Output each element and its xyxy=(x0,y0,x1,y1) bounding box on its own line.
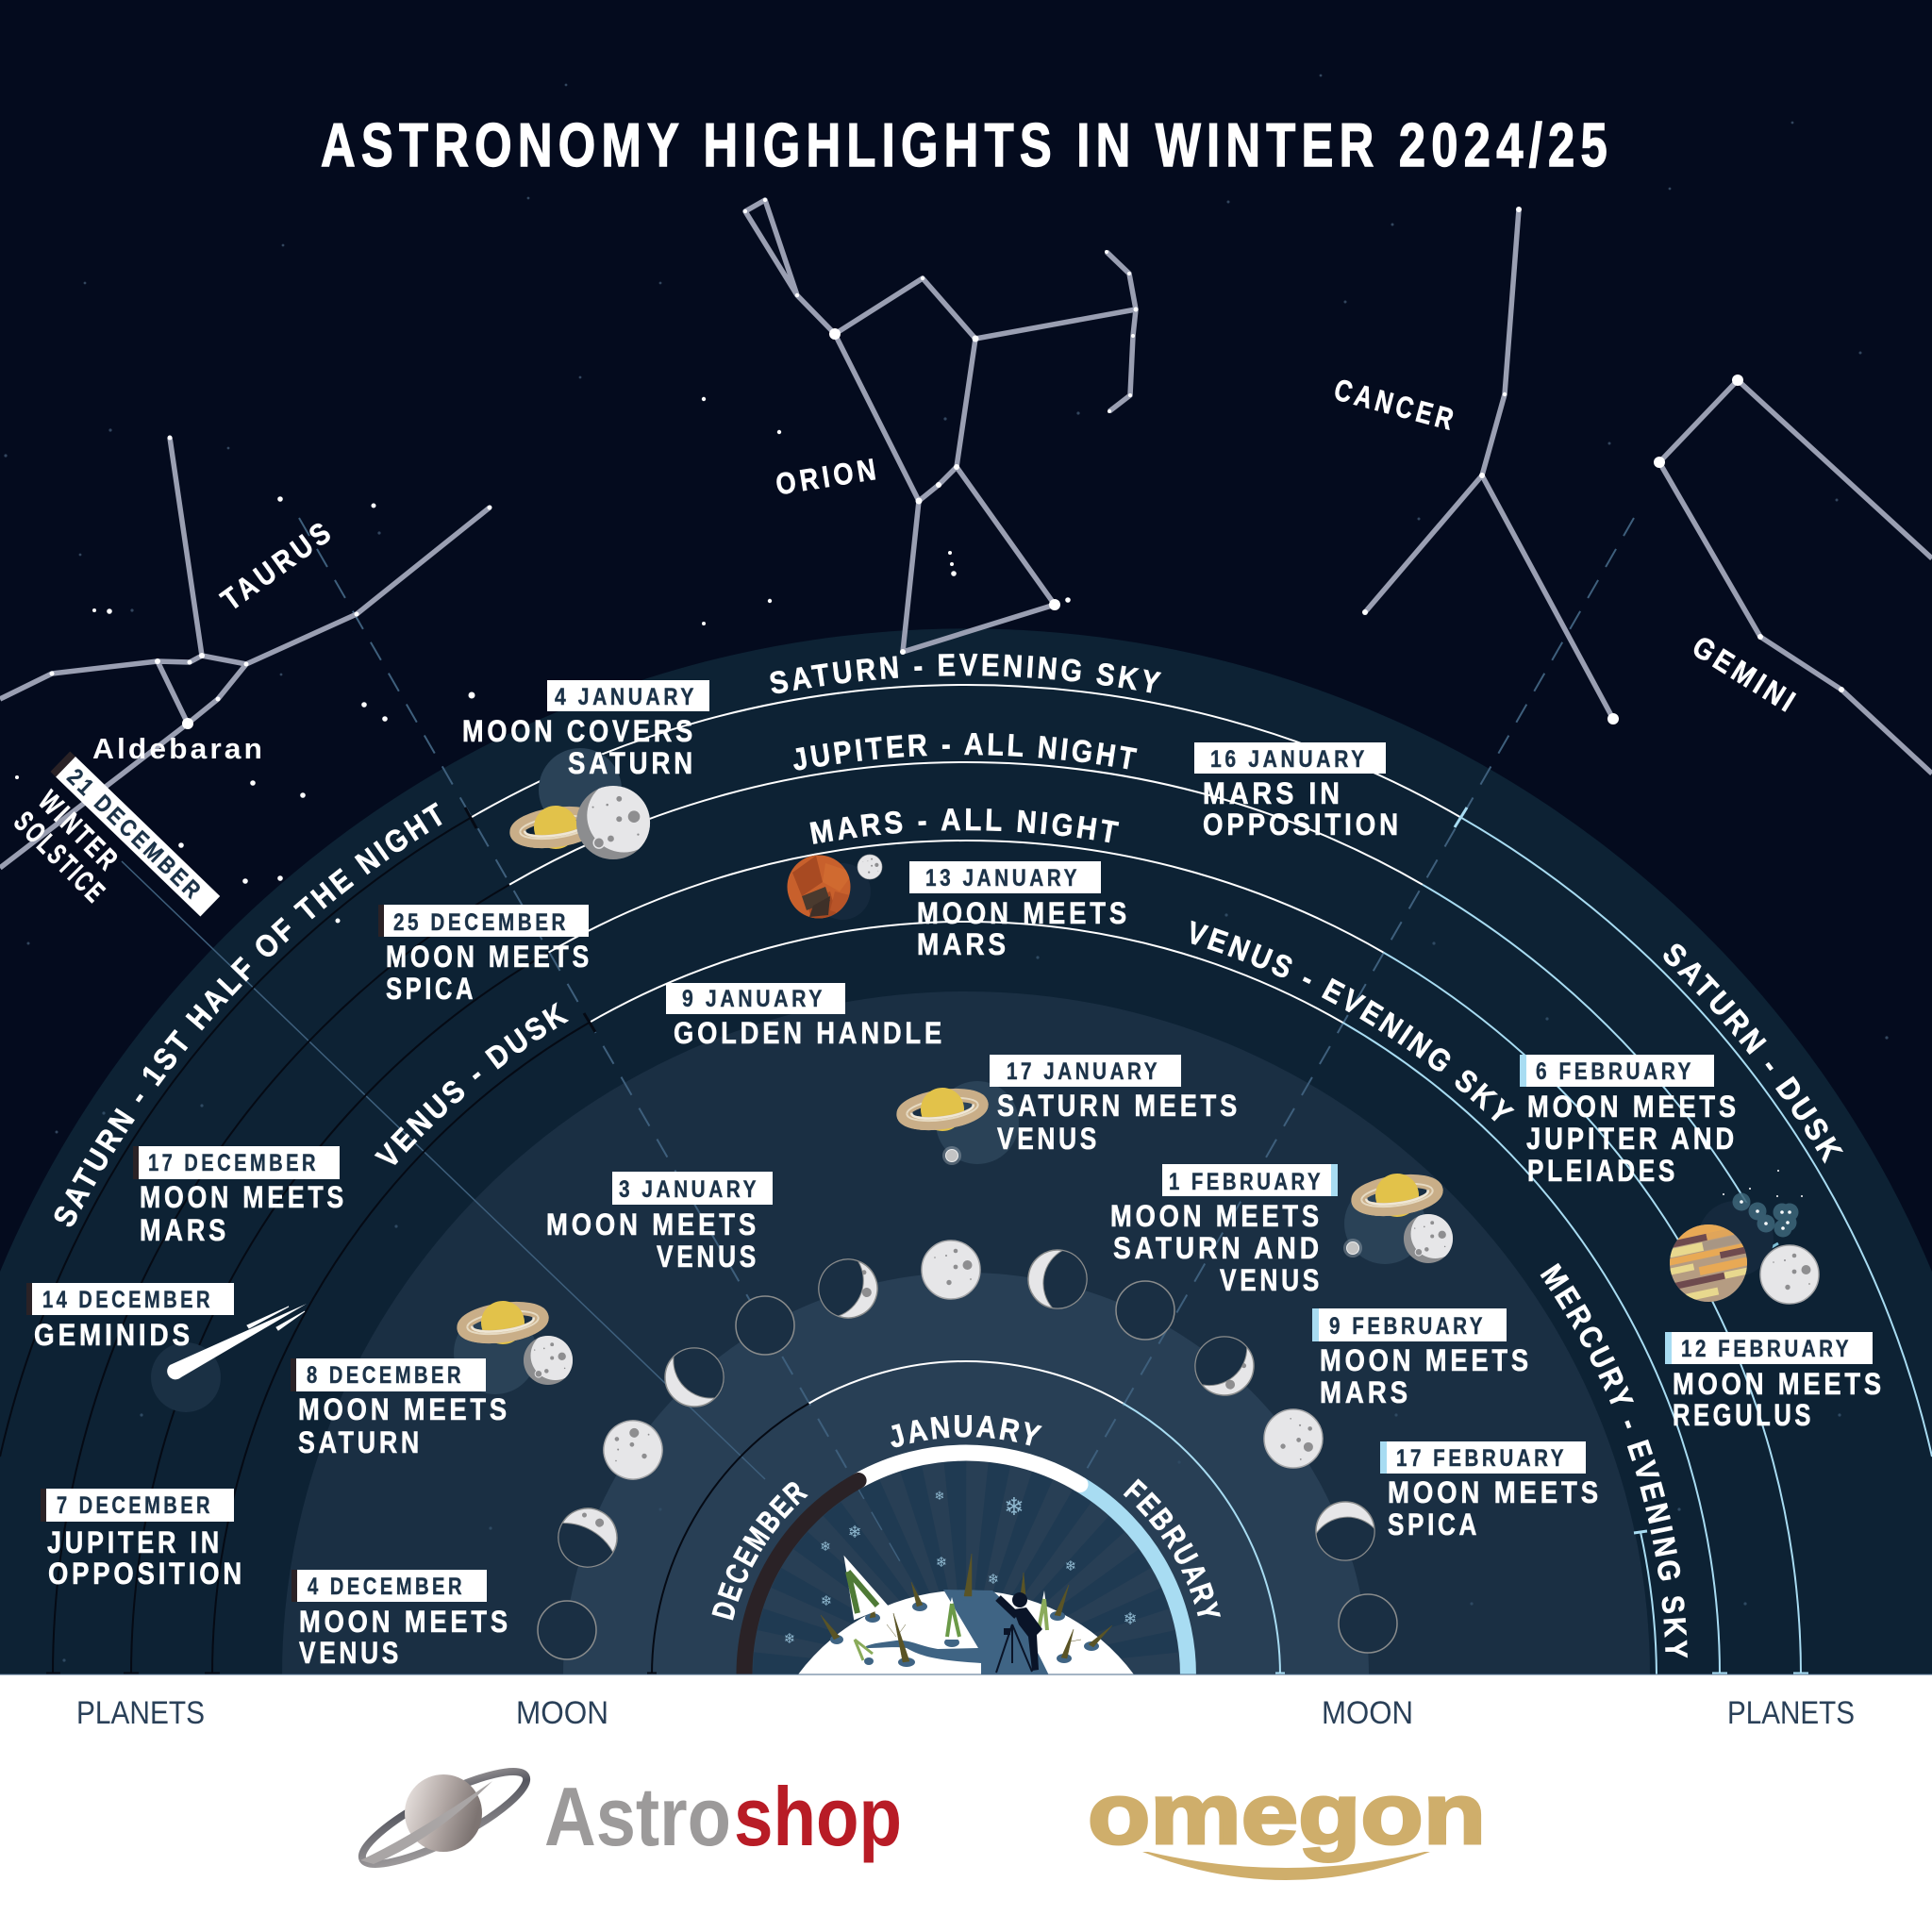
callout: 4 December: 4 DECEMBER xyxy=(308,1574,465,1600)
callout: 17 January: SATURN MEETS xyxy=(997,1089,1241,1123)
callout: 13 January: MOON MEETS xyxy=(917,896,1130,930)
callout: 4 January: MOON COVERS xyxy=(462,714,696,748)
curved track labels: MARS - ALL NIGHT xyxy=(809,808,1119,844)
faint background stars xyxy=(4,75,1889,1134)
curved track labels: VENUS - DUSK xyxy=(374,1002,570,1165)
label: Orion: ORION xyxy=(774,451,882,501)
month arc: February xyxy=(1080,1485,1188,1689)
moon: crescent 4 xyxy=(653,1336,736,1419)
callout: 12 February: 12 FEBRUARY xyxy=(1681,1336,1852,1362)
central sun-ray fan xyxy=(859,1568,1073,1781)
footer labels xyxy=(76,1695,1855,1731)
callout: 13 January: 13 JANUARY xyxy=(925,865,1080,891)
snowy ground xyxy=(798,1591,1134,1674)
callout: 9 January: 9 JANUARY xyxy=(682,986,825,1012)
logo: omegon: omegon xyxy=(1088,1767,1486,1862)
callout: 1 February: VENUS xyxy=(1220,1263,1323,1297)
callout: 8 December: SATURN xyxy=(298,1425,423,1459)
logo: Astroshop: shop xyxy=(734,1770,902,1863)
snowflakes: ❄ xyxy=(988,1571,999,1588)
callout: 17 December: MOON MEETS xyxy=(140,1180,347,1214)
callout: 8 December: 8 DECEMBER xyxy=(307,1362,464,1389)
month labels: JANUARY xyxy=(891,1415,1042,1447)
bare trees xyxy=(821,1554,1112,1662)
constellation: Gemini xyxy=(1654,375,1932,774)
event: Moon meets Saturn illustration xyxy=(454,1295,580,1394)
snowflakes: ❄ xyxy=(1123,1609,1138,1629)
moon: waxing phase 2 xyxy=(548,1498,627,1577)
curved track labels xyxy=(55,653,1843,1658)
observer with telescope xyxy=(996,1592,1042,1673)
callout: 3 January: VENUS xyxy=(657,1240,759,1274)
callout: 17 December: 17 DECEMBER xyxy=(148,1150,319,1176)
label: Gemini: GEMINI xyxy=(1687,629,1805,721)
snowflakes: ❄ xyxy=(1004,1493,1024,1522)
event: Moon meets Mars illustration xyxy=(787,855,882,920)
month arc: January xyxy=(858,1453,1080,1485)
callout: 4 December: MOON MEETS xyxy=(299,1605,511,1639)
event: Geminids meteor xyxy=(151,1304,307,1412)
moon: crescent 6 xyxy=(810,1251,886,1326)
label: Taurus: TAURUS xyxy=(215,513,340,617)
dashed month boundary line: January start xyxy=(299,518,906,1571)
snowflakes: ❄ xyxy=(936,1554,947,1571)
logo planet and ring xyxy=(353,1757,536,1879)
callout: 17 February xyxy=(1380,1441,1602,1541)
callout: 9 February: MOON MEETS xyxy=(1320,1343,1532,1377)
curved track labels: VENUS - EVENING SKY xyxy=(1191,921,1515,1122)
callout: 1 February: SATURN AND xyxy=(1113,1231,1323,1265)
callout: 7 December: OPPOSITION xyxy=(48,1557,245,1591)
moon: crescent 10 xyxy=(1183,1324,1266,1407)
callout: 3 January: MOON MEETS xyxy=(546,1208,759,1241)
constellation: Taurus xyxy=(0,436,492,868)
moon: full 2 xyxy=(922,1241,980,1299)
moon phases arc xyxy=(538,1241,1397,1659)
callout: 21 December winter solstice: WINTER xyxy=(32,784,126,878)
callout: 6 February: PLEIADES xyxy=(1527,1154,1678,1188)
callout: 9 February: 9 FEBRUARY xyxy=(1329,1313,1486,1340)
snowflakes xyxy=(784,1490,1138,1647)
callout: 12 February xyxy=(1665,1332,1885,1432)
callout: 21 December winter solstice xyxy=(8,751,220,917)
snowflakes: ❄ xyxy=(784,1630,795,1647)
callout: 16 January xyxy=(1194,742,1402,841)
callout: 17 December xyxy=(133,1146,347,1247)
callout: 6 February: 6 FEBRUARY xyxy=(1536,1058,1694,1085)
moon: full 1 xyxy=(595,1412,671,1488)
track end ticks xyxy=(46,808,1808,1674)
callout: 4 January: SATURN xyxy=(568,746,696,780)
callout: 17 January xyxy=(990,1055,1241,1156)
river xyxy=(866,1590,1049,1675)
footer labels: MOON xyxy=(1322,1695,1413,1731)
snowflakes: ❄ xyxy=(847,1523,862,1542)
Saturn track xyxy=(0,685,1932,1457)
curved track labels: JUPITER - ALL NIGHT xyxy=(793,733,1138,770)
callout: 6 February xyxy=(1520,1055,1740,1188)
curved track labels: SATURN - EVENING SKY xyxy=(770,653,1162,694)
moon: new 1 xyxy=(538,1601,596,1659)
callout: 13 January xyxy=(909,861,1130,961)
sky bands xyxy=(0,628,1932,1675)
callout: 14 December xyxy=(26,1283,234,1352)
Mars track xyxy=(131,841,1801,1675)
callout: 17 December: MARS xyxy=(140,1213,229,1247)
callout: 21 December winter solstice: 21 DECEMBER xyxy=(62,764,208,906)
callout: 17 January: VENUS xyxy=(997,1122,1100,1156)
callout: 9 January: GOLDEN HANDLE xyxy=(674,1016,945,1050)
footer panel xyxy=(0,1674,1932,1932)
event: Moon covers Saturn illustration xyxy=(513,748,660,859)
callout: 16 January: 16 JANUARY xyxy=(1210,746,1368,773)
callout: 9 February: MARS xyxy=(1320,1375,1411,1409)
callout: 16 January: MARS IN xyxy=(1203,776,1343,810)
callout: 25 December: 25 DECEMBER xyxy=(393,909,569,936)
callout: 6 February: MOON MEETS xyxy=(1527,1090,1740,1124)
bright stars xyxy=(15,397,1071,884)
month labels: FEBRUARY xyxy=(1123,1478,1221,1617)
label: Cancer: CANCER xyxy=(1331,373,1460,438)
Venus track xyxy=(212,922,1720,1675)
callout: 9 February xyxy=(1312,1308,1532,1409)
snowflakes: ❄ xyxy=(821,1592,832,1609)
callout: 7 December: JUPITER IN xyxy=(47,1525,223,1559)
dashed month boundary line: February start xyxy=(1028,518,1634,1571)
month labels xyxy=(711,1415,1221,1621)
moon: new 2 xyxy=(736,1296,794,1355)
callout: 8 December xyxy=(291,1358,510,1459)
callout: 3 January xyxy=(546,1172,773,1274)
callout: 25 December: MOON MEETS xyxy=(386,940,592,974)
month labels: DECEMBER xyxy=(711,1482,808,1621)
callout: 17 January: 17 JANUARY xyxy=(1007,1058,1160,1085)
event: Jupiter, Pleiades and Moon illustration xyxy=(1657,1170,1819,1305)
callout: 8 December: MOON MEETS xyxy=(298,1392,510,1426)
callout: 16 January: OPPOSITION xyxy=(1203,808,1402,841)
callout: 7 December xyxy=(41,1489,245,1591)
callout: 1 February xyxy=(1110,1164,1338,1297)
callout: 14 December: 14 DECEMBER xyxy=(42,1287,213,1313)
snowflakes: ❄ xyxy=(935,1490,944,1504)
footer labels: PLANETS xyxy=(1727,1695,1855,1731)
callout: 9 January xyxy=(666,983,945,1050)
tree bases xyxy=(830,1602,1099,1667)
snowflakes: ❄ xyxy=(820,1540,831,1555)
moon cycle ring line xyxy=(652,1361,1280,1675)
moon: new 4 xyxy=(1339,1594,1397,1653)
callout: 4 January: 4 JANUARY xyxy=(555,684,697,710)
callout: 25 December: SPICA xyxy=(386,972,476,1006)
month arc: December xyxy=(744,1481,858,1689)
curved track labels: SATURN - DUSK xyxy=(1664,943,1843,1164)
logo: Astroshop xyxy=(353,1757,902,1879)
pine trees xyxy=(845,1558,1049,1660)
curved track labels: SATURN - 1ST HALF OF THE NIGHT xyxy=(55,802,442,1226)
snowflakes: ❄ xyxy=(1065,1557,1076,1574)
Mercury track xyxy=(1641,1532,1657,1675)
callout: 17 February: 17 FEBRUARY xyxy=(1396,1445,1567,1472)
callout: 13 January: MARS xyxy=(917,927,1009,961)
event: Moon, Saturn and Venus illustration xyxy=(1343,1168,1460,1264)
logo wordmark: Astro xyxy=(544,1770,731,1863)
callout: 14 December: GEMINIDS xyxy=(34,1318,193,1352)
moon: crescent 12 xyxy=(1313,1499,1377,1563)
callout: 21 December winter solstice: SOLSTICE xyxy=(8,805,113,910)
constellation: Cancer xyxy=(1362,207,1619,724)
earth with snow, trees and observer xyxy=(798,1554,1134,1675)
label: Aldebaran: Aldebaran xyxy=(92,732,265,765)
title: ASTRONOMY HIGHLIGHTS IN WINTER 2024/25 xyxy=(321,110,1613,179)
callout: 25 December xyxy=(378,905,592,1006)
callout: 3 January: 3 JANUARY xyxy=(619,1176,759,1203)
callout: 12 February: MOON MEETS xyxy=(1673,1367,1885,1401)
footer labels: PLANETS xyxy=(76,1695,205,1731)
faint stars on bands xyxy=(62,913,1841,1662)
moon: crescent 8 xyxy=(1024,1245,1091,1313)
event: Saturn meets Venus illustration xyxy=(900,1081,1019,1165)
winter solstice line xyxy=(122,861,765,1479)
callout: 4 December: VENUS xyxy=(299,1636,402,1670)
moon: full 3 xyxy=(1252,1397,1335,1480)
footer labels: MOON xyxy=(516,1695,608,1731)
curved track labels: MERCURY - EVENING SKY xyxy=(1540,1262,1688,1658)
callout: 4 December xyxy=(291,1570,511,1670)
Jupiter track xyxy=(53,762,1772,1675)
callout: 7 December: 7 DECEMBER xyxy=(57,1492,213,1519)
moon: new 3 xyxy=(1116,1281,1174,1340)
constellation: Orion xyxy=(743,198,1138,655)
callout: 1 February: MOON MEETS xyxy=(1110,1199,1323,1233)
callout: 1 February: 1 FEBRUARY xyxy=(1169,1169,1324,1195)
callout: 6 February: JUPITER AND xyxy=(1526,1122,1738,1156)
callout: 4 January xyxy=(462,680,709,780)
callout: 12 February: REGULUS xyxy=(1673,1398,1814,1432)
callout: 17 February: MOON MEETS xyxy=(1388,1475,1602,1509)
callout: 17 February: SPICA xyxy=(1388,1507,1480,1541)
